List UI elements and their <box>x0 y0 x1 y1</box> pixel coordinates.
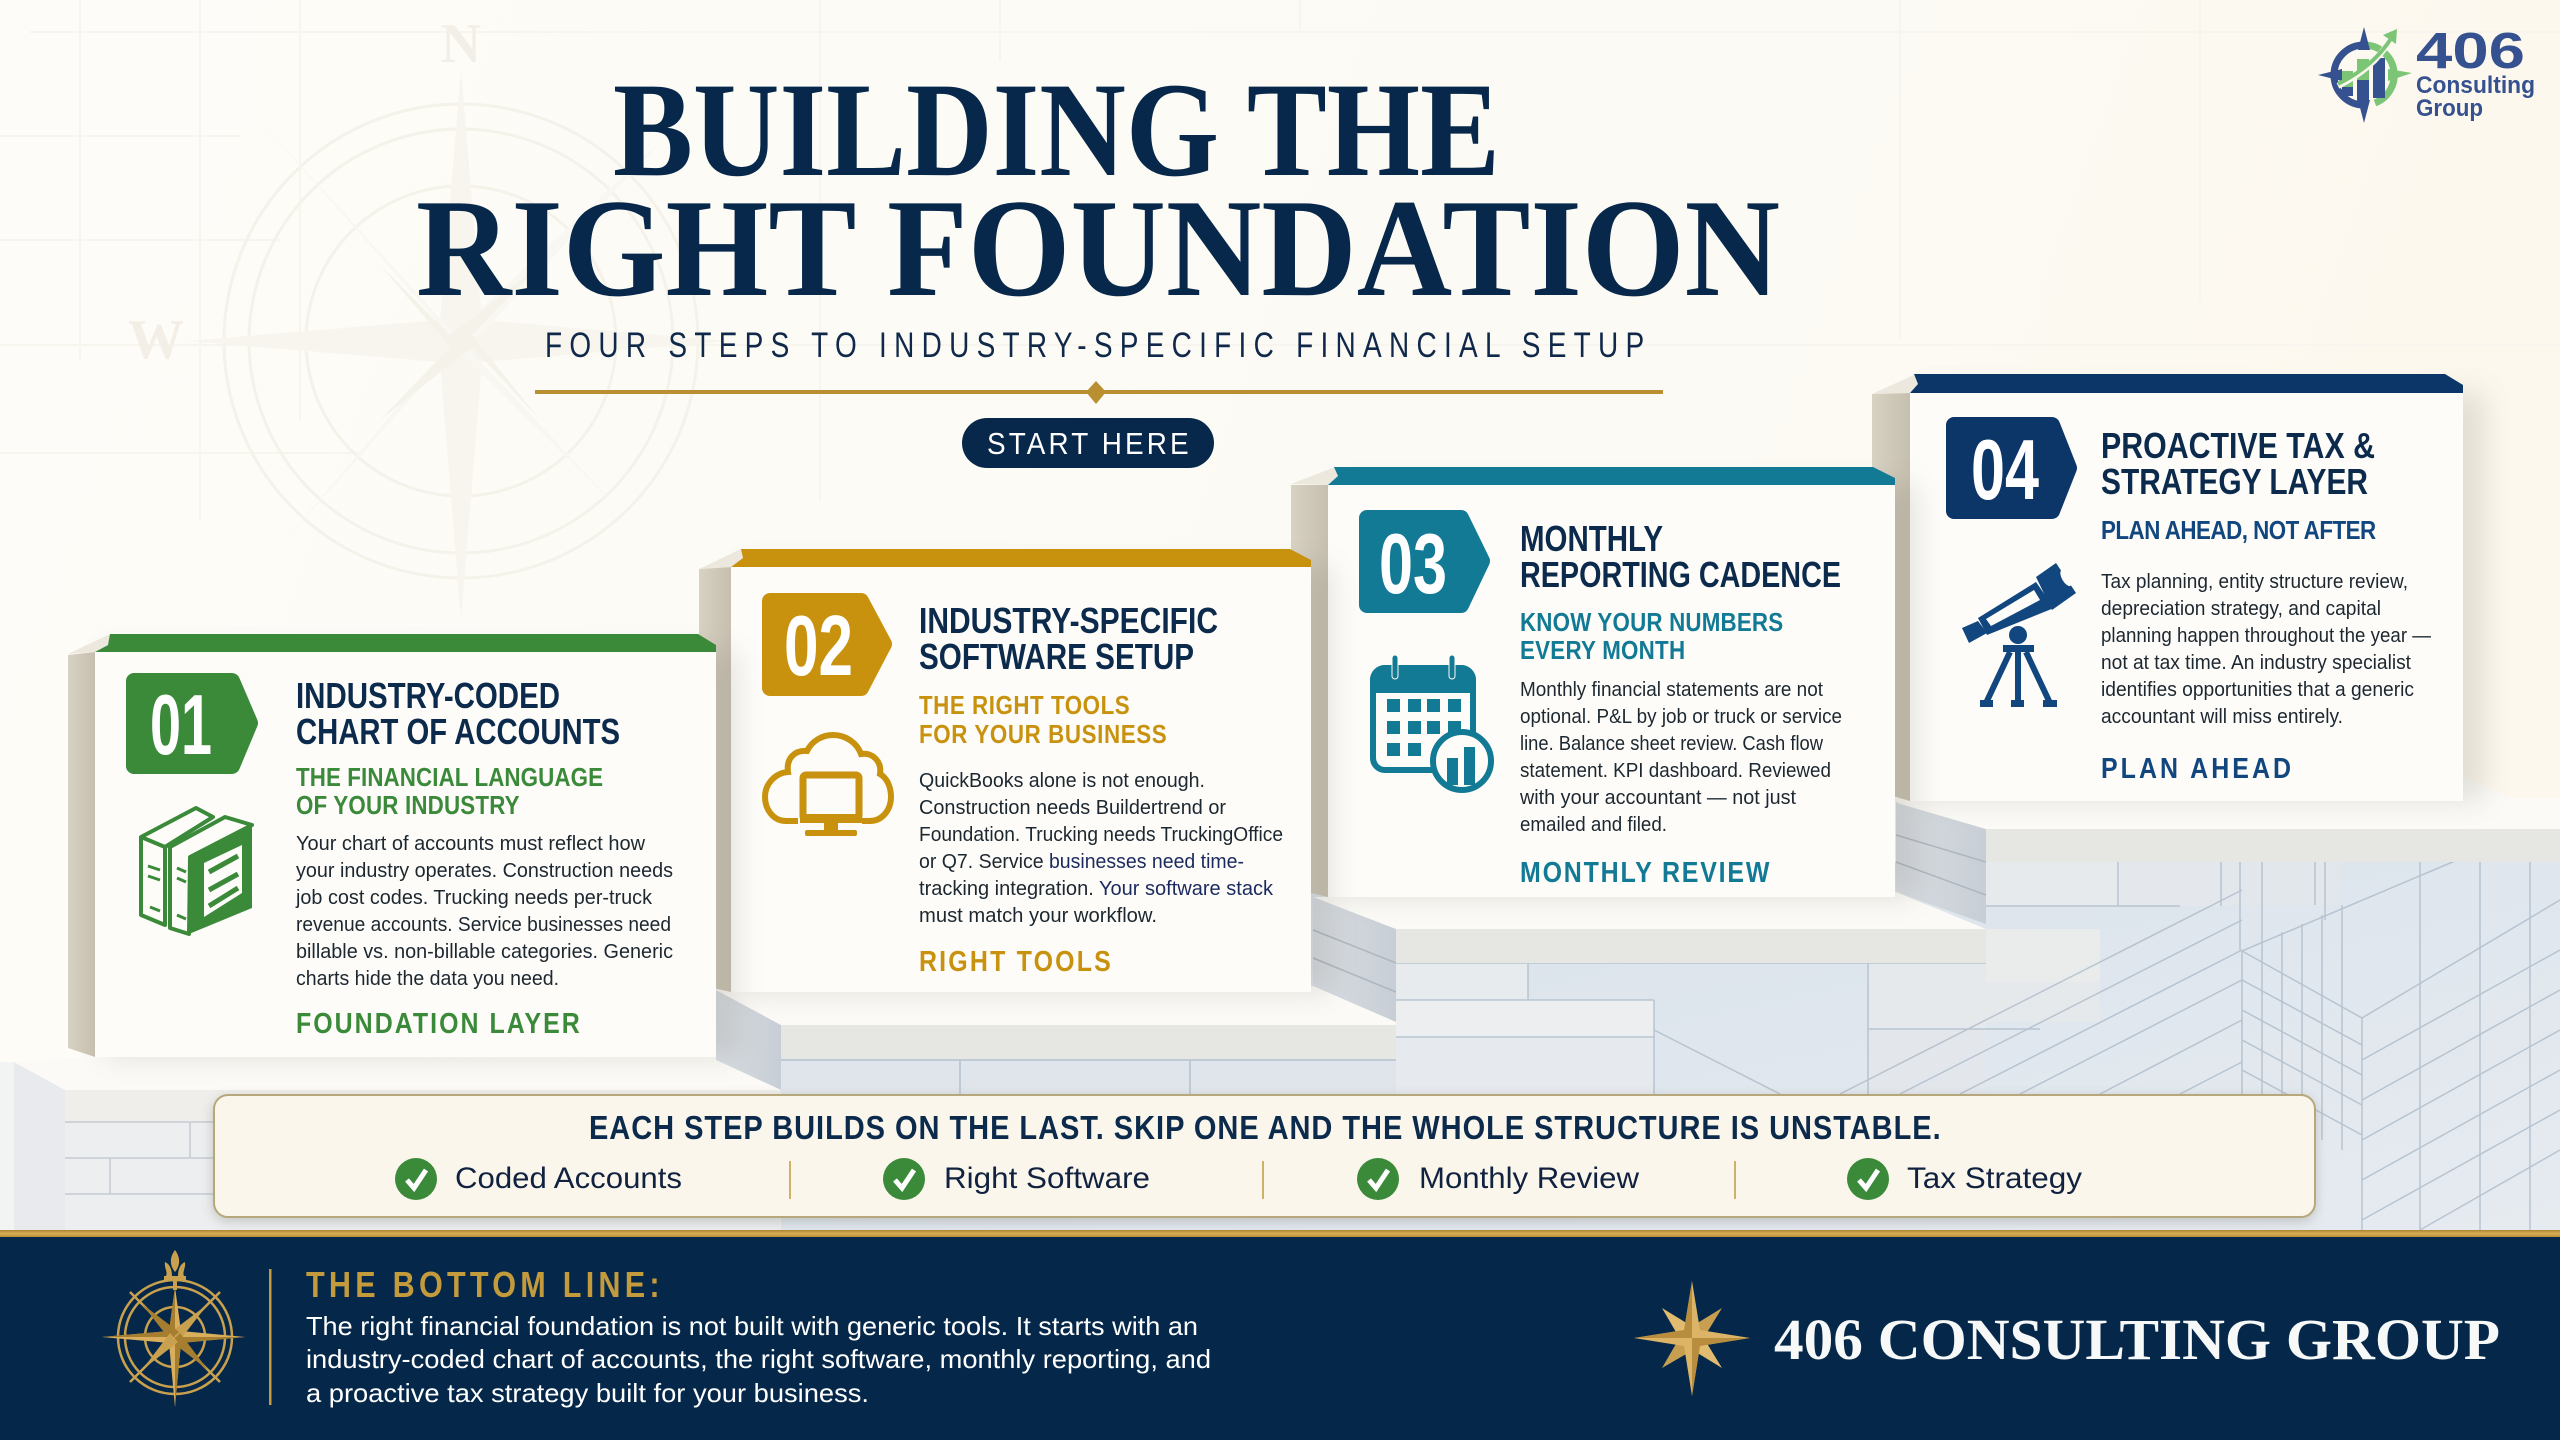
heading: REPORTING CADENCE <box>1520 554 1841 595</box>
body text: billable vs. non-billable categories. Generic <box>296 940 673 963</box>
checklist: Monthly Review <box>1419 1162 1639 1195</box>
panel: step 3 monthly reporting <box>1291 467 1916 897</box>
body text: Construction needs Buildertrend or <box>919 796 1226 819</box>
body text: not at tax time. An industry specialist <box>2101 651 2411 674</box>
subtitle: FOUR STEPS TO INDUSTRY-SPECIFIC FINANCIAL SETUP <box>545 325 1644 365</box>
heading: PROACTIVE TAX & <box>2101 425 2375 466</box>
body text: or Q7. Service businesses need time- <box>919 850 1244 873</box>
body text: with your accountant — not just <box>1519 786 1796 809</box>
badge 01: 01 <box>150 678 212 773</box>
badge 02: 02 <box>784 599 853 694</box>
plinth: step 3 <box>1313 892 1986 1022</box>
footer tag: PLAN AHEAD <box>2101 752 2291 784</box>
body text: optional. P&L by job or truck or service <box>1520 705 1842 728</box>
title: RIGHT FOUNDATION <box>416 171 1780 326</box>
bottom line heading: THE BOTTOM LINE: <box>306 1266 660 1306</box>
subheading <box>1520 608 1783 665</box>
callout banner <box>213 1095 2315 1221</box>
plinth: step 4 <box>1896 776 2560 924</box>
body text: identifies opportunities that a generic <box>2101 678 2414 701</box>
footer tag: FOUNDATION LAYER <box>296 1007 580 1039</box>
subheading: KNOW YOUR NUMBERS <box>1520 608 1783 637</box>
heading <box>1520 518 1841 595</box>
bottom line paragraph <box>306 1311 1211 1408</box>
checklist <box>395 1158 2082 1200</box>
body text: charts hide the data you need. <box>296 967 559 990</box>
body text: tracking integration. Your software stack <box>919 877 1274 900</box>
title <box>416 56 1780 326</box>
title: BUILDING THE <box>613 56 1500 205</box>
bottom line paragraph: a proactive tax strategy built for your business. <box>306 1378 869 1408</box>
badge 03: 03 <box>1379 517 1447 612</box>
logo: 406 Consulting Group: Consulting <box>2416 72 2535 99</box>
body text: accountant will miss entirely. <box>2101 705 2343 728</box>
subheading <box>296 763 603 820</box>
body text: your industry operates. Construction needs <box>296 859 673 882</box>
badge 04: 04 <box>1971 423 2039 518</box>
heading: SOFTWARE SETUP <box>919 636 1194 677</box>
banner headline: EACH STEP BUILDS ON THE LAST. SKIP ONE AND THE WHOLE STRUCTURE IS UNSTABLE. <box>589 1109 1941 1146</box>
body text: Monthly financial statements are not <box>1520 678 1823 701</box>
body text: planning happen throughout the year — <box>2101 624 2431 647</box>
footer tag: RIGHT TOOLS <box>919 945 1111 977</box>
body text: Foundation. Trucking needs TruckingOffice <box>919 823 1283 846</box>
icon: gold star <box>1634 1281 1750 1396</box>
panel: step 1 chart of accounts <box>68 634 736 1057</box>
icon: calendar with chart <box>1373 655 1491 790</box>
subheading <box>919 691 1167 749</box>
checklist: Coded Accounts <box>455 1162 682 1195</box>
body text <box>2101 570 2431 728</box>
heading: INDUSTRY-SPECIFIC <box>919 600 1218 641</box>
body text: QuickBooks alone is not enough. <box>919 769 1205 792</box>
start here pill <box>962 418 1214 468</box>
icon: cloud with monitor <box>765 735 891 836</box>
body text: statement. KPI dashboard. Reviewed <box>1520 759 1831 782</box>
background compass rose: N <box>441 13 481 75</box>
blueprint foundation backdrop <box>781 860 2560 1230</box>
subheading: EVERY MONTH <box>1520 636 1685 665</box>
icon: telescope <box>1962 563 2076 707</box>
plinth: step 2 <box>716 986 1396 1094</box>
panel: step 2 software setup <box>699 549 1331 992</box>
subheading: THE FINANCIAL LANGUAGE <box>296 763 603 792</box>
background compass rose: W <box>128 309 184 371</box>
body text: emailed and filed. <box>1520 813 1667 836</box>
heading: MONTHLY <box>1520 518 1663 559</box>
logo: 406 Consulting Group: Group <box>2416 95 2483 122</box>
heading <box>919 600 1218 677</box>
background compass rose <box>128 13 730 620</box>
body text: Tax planning, entity structure review, <box>2101 570 2408 593</box>
body text <box>919 769 1283 927</box>
bottom line paragraph: industry-coded chart of accounts, the right software, monthly reporting, and <box>306 1344 1211 1374</box>
brand name: 406 CONSULTING GROUP <box>1774 1307 2500 1372</box>
background map grid <box>0 0 2560 520</box>
subheading: FOR YOUR BUSINESS <box>919 720 1167 749</box>
heading: CHART OF ACCOUNTS <box>296 711 620 752</box>
heading: INDUSTRY-CODED <box>296 675 560 716</box>
start here pill: START HERE <box>987 427 1189 461</box>
checklist: Tax Strategy <box>1907 1162 2082 1195</box>
body text: depreciation strategy, and capital <box>2101 597 2381 620</box>
heading <box>2101 425 2375 502</box>
body text: Your chart of accounts must reflect how <box>296 832 645 855</box>
plinth: step 1 <box>0 1057 781 1230</box>
footer band <box>0 1230 2560 1440</box>
body text <box>295 832 673 990</box>
icon: green books <box>141 808 252 934</box>
body text: job cost codes. Trucking needs per-truck <box>295 886 653 909</box>
icon: gold compass <box>102 1250 245 1407</box>
heading: STRATEGY LAYER <box>2101 461 2368 502</box>
body text: line. Balance sheet review. Cash flow <box>1520 732 1823 755</box>
subheading: THE RIGHT TOOLS <box>919 691 1130 720</box>
subheading: PLAN AHEAD, NOT AFTER <box>2101 516 2376 545</box>
heading <box>296 675 620 752</box>
panel: step 4 proactive tax <box>1872 374 2485 801</box>
divider <box>269 1269 272 1405</box>
body text: must match your workflow. <box>919 904 1157 927</box>
bottom line paragraph: The right financial foundation is not built with generic tools. It starts with an <box>306 1311 1198 1341</box>
checklist: Right Software <box>944 1162 1150 1195</box>
footer tag: MONTHLY REVIEW <box>1520 856 1770 888</box>
subheading: OF YOUR INDUSTRY <box>296 791 520 820</box>
logo: 406 Consulting Group: 406 <box>2416 22 2525 79</box>
logo: 406 Consulting Group <box>2318 22 2535 123</box>
body text <box>1519 678 1842 836</box>
body text: revenue accounts. Service businesses need <box>296 913 671 936</box>
gold divider with diamond <box>535 381 1663 404</box>
